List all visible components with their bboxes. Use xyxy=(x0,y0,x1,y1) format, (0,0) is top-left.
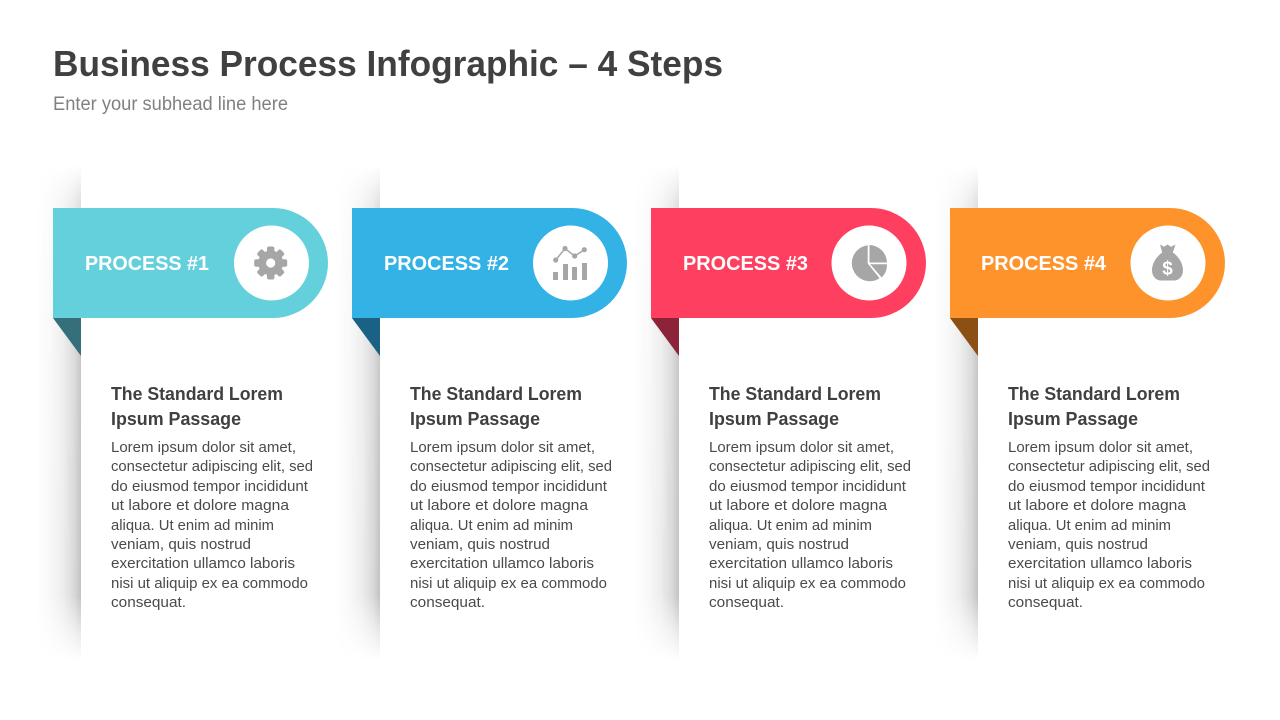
icon: money bag: $ xyxy=(1162,258,1173,280)
icon: gear xyxy=(254,246,287,280)
body text: do eiusmod tempor incididunt xyxy=(709,479,906,495)
body text: exercitation ullamco laboris xyxy=(709,556,893,572)
heading xyxy=(410,384,582,429)
body text: consequat. xyxy=(111,595,186,611)
body text: Lorem ipsum dolor sit amet, xyxy=(1008,440,1193,456)
label: PROCESS #4 xyxy=(981,253,1107,275)
ribbon fold xyxy=(950,318,978,356)
icon circle xyxy=(533,226,608,300)
body text: Lorem ipsum dolor sit amet, xyxy=(709,440,894,456)
body text: ut labore et dolore magna xyxy=(1008,498,1187,514)
label: PROCESS #3 xyxy=(683,253,808,275)
body text: Lorem ipsum dolor sit amet, xyxy=(111,440,296,456)
ribbon fold xyxy=(651,318,679,356)
body text: nisi ut aliquip ex ea commodo xyxy=(410,576,607,592)
heading: The Standard Lorem xyxy=(709,384,881,404)
body text: do eiusmod tempor incididunt xyxy=(111,479,308,495)
ribbon xyxy=(53,208,328,318)
ribbon xyxy=(651,208,926,318)
panel: process 2 xyxy=(335,165,627,660)
body text: veniam, quis nostrud xyxy=(1008,537,1148,553)
icon circle xyxy=(1130,226,1206,300)
heading: Ipsum Passage xyxy=(709,409,839,429)
body text: consequat. xyxy=(709,595,784,611)
label: PROCESS #2 xyxy=(384,253,509,275)
body text: exercitation ullamco laboris xyxy=(111,556,295,572)
body text: consectetur adipiscing elit, sed xyxy=(111,459,313,475)
body text: consequat. xyxy=(410,595,485,611)
panel: process 3 xyxy=(634,165,926,660)
body text: consequat. xyxy=(1008,595,1083,611)
heading xyxy=(1008,384,1180,429)
icon: chart xyxy=(553,246,587,280)
card shadow xyxy=(52,176,81,650)
body text: ut labore et dolore magna xyxy=(410,498,589,514)
subhead: Enter your subhead line here xyxy=(53,94,288,115)
ribbon xyxy=(950,208,1225,318)
body text: aliqua. Ut enim ad minim xyxy=(111,518,274,534)
body text xyxy=(111,440,313,611)
body text: aliqua. Ut enim ad minim xyxy=(1008,518,1171,534)
ribbon xyxy=(352,208,627,318)
body text: nisi ut aliquip ex ea commodo xyxy=(1008,576,1205,592)
body text xyxy=(1008,440,1210,611)
body text: consectetur adipiscing elit, sed xyxy=(1008,459,1210,475)
body text: aliqua. Ut enim ad minim xyxy=(709,518,872,534)
body text: veniam, quis nostrud xyxy=(111,537,251,553)
heading: Ipsum Passage xyxy=(111,409,241,429)
heading: Ipsum Passage xyxy=(1008,409,1138,429)
panel: process 1 xyxy=(36,165,328,660)
ribbon fold xyxy=(53,318,81,356)
body text: veniam, quis nostrud xyxy=(709,537,849,553)
body text: nisi ut aliquip ex ea commodo xyxy=(709,576,906,592)
heading: The Standard Lorem xyxy=(111,384,283,404)
heading: Ipsum Passage xyxy=(410,409,540,429)
body text: exercitation ullamco laboris xyxy=(410,556,594,572)
body text: ut labore et dolore magna xyxy=(709,498,888,514)
body text: exercitation ullamco laboris xyxy=(1008,556,1192,572)
body text: Lorem ipsum dolor sit amet, xyxy=(410,440,595,456)
card shadow xyxy=(650,176,679,650)
body text: nisi ut aliquip ex ea commodo xyxy=(111,576,308,592)
body text xyxy=(709,440,911,611)
heading: The Standard Lorem xyxy=(1008,384,1180,404)
title: Business Process Infographic – 4 Steps xyxy=(53,43,723,84)
icon: money bag xyxy=(1152,244,1183,280)
body text: ut labore et dolore magna xyxy=(111,498,290,514)
card shadow xyxy=(949,176,978,650)
heading: The Standard Lorem xyxy=(410,384,582,404)
body text xyxy=(410,440,612,611)
body text: do eiusmod tempor incididunt xyxy=(410,479,607,495)
label: PROCESS #1 xyxy=(85,253,209,275)
icon circle xyxy=(832,226,906,300)
body text: do eiusmod tempor incididunt xyxy=(1008,479,1205,495)
body text: aliqua. Ut enim ad minim xyxy=(410,518,573,534)
heading xyxy=(709,384,881,429)
body text: consectetur adipiscing elit, sed xyxy=(709,459,911,475)
body text: consectetur adipiscing elit, sed xyxy=(410,459,612,475)
icon circle xyxy=(234,226,309,300)
icon: pie chart xyxy=(852,245,887,281)
card shadow xyxy=(351,176,380,650)
body text: veniam, quis nostrud xyxy=(410,537,550,553)
ribbon fold xyxy=(352,318,380,356)
heading xyxy=(111,384,283,429)
panel: process 4 xyxy=(933,165,1225,660)
